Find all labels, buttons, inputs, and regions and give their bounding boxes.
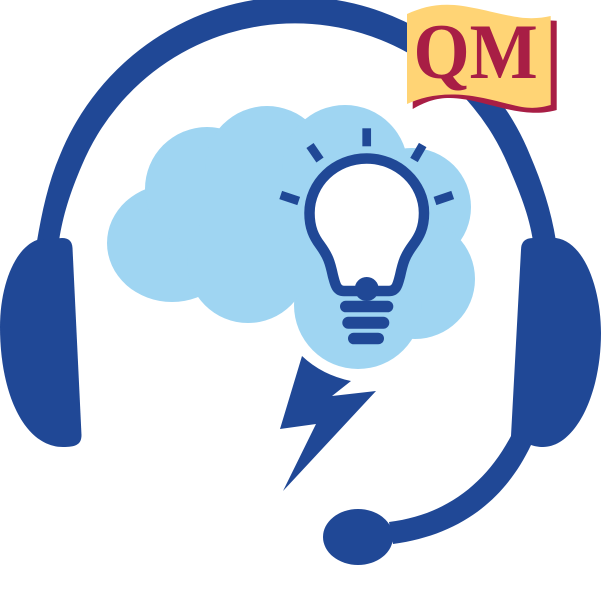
- QM logo flag: [407, 5, 557, 113]
- left ear cup: [0, 238, 82, 447]
- right ear cup: [511, 238, 601, 447]
- headband: [37, 0, 556, 241]
- light rays: [281, 128, 453, 201]
- cloud: [107, 105, 475, 369]
- light bulb: [310, 158, 424, 344]
- QM letters: QM: [414, 9, 538, 96]
- lightning bolt: [280, 356, 376, 491]
- microphone boom: [323, 428, 531, 565]
